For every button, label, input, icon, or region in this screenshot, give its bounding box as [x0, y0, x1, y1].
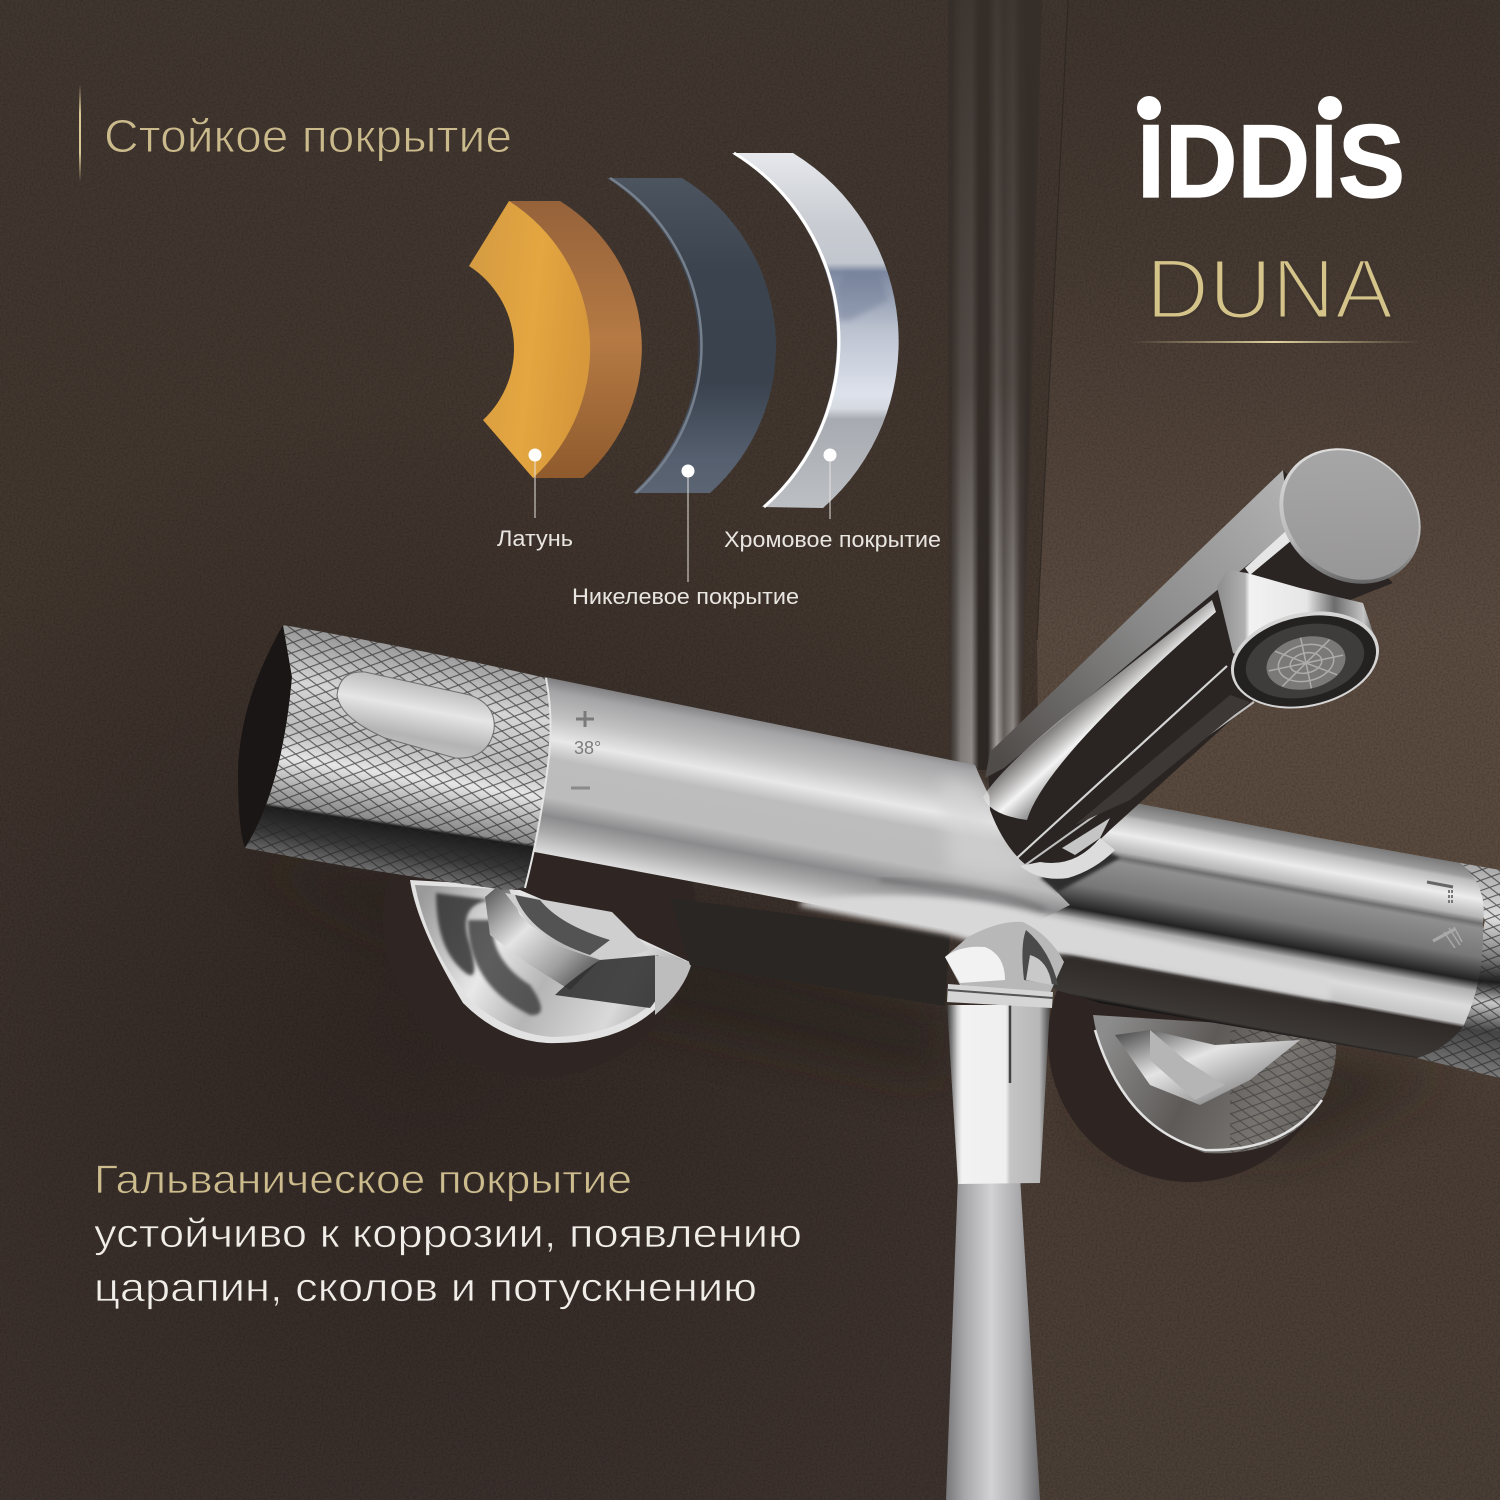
aerator housing	[1217, 570, 1378, 680]
vertical shower rail	[948, 0, 1068, 770]
layer: nickel	[607, 178, 776, 493]
layer: chrome	[732, 153, 899, 508]
heading: Стойкое покрытие	[104, 110, 512, 162]
centre junction highlights	[800, 779, 1330, 1000]
knob control pill	[337, 672, 494, 758]
mixer body right	[1000, 775, 1484, 1058]
logo dots	[1137, 96, 1342, 120]
spout	[983, 420, 1448, 879]
wall mount right	[1048, 990, 1336, 1182]
dark underside left	[670, 898, 950, 1006]
mixer body left	[524, 677, 1070, 930]
wall shadows	[240, 860, 1450, 1150]
brand logo	[1137, 96, 1405, 220]
label: chrome: Хромовое покрытие	[724, 527, 941, 552]
shower diverter icon	[1427, 882, 1462, 948]
aerator face	[1222, 598, 1388, 722]
shower mixer	[200, 420, 1500, 1500]
material layers diagram	[469, 153, 941, 609]
series underline	[1130, 341, 1420, 343]
description line 2: устойчиво к коррозии, появлению	[94, 1212, 802, 1256]
heading accent line	[79, 84, 81, 182]
mixer temperature marks: 38°	[574, 738, 601, 758]
bottom description	[94, 1158, 802, 1310]
series name: DUNA	[1146, 242, 1393, 336]
layer: brass	[469, 201, 642, 478]
label: nickel: Никелевое покрытие	[572, 584, 799, 609]
hose connector	[945, 922, 1064, 1184]
description line 3: царапин, сколов и потускнению	[94, 1266, 757, 1310]
description highlight: Гальваническое покрытие	[94, 1158, 632, 1202]
wordmark: IDDIS	[1137, 104, 1405, 220]
label: brass: Латунь	[497, 526, 573, 551]
spout head disc	[1252, 420, 1448, 612]
mixer temperature marks	[571, 711, 601, 788]
left knurled knob	[238, 625, 552, 890]
shower hose	[946, 1176, 1040, 1500]
wall mount left	[383, 763, 697, 1077]
callout markers	[528, 448, 836, 582]
right knurled knob	[1418, 862, 1500, 1078]
